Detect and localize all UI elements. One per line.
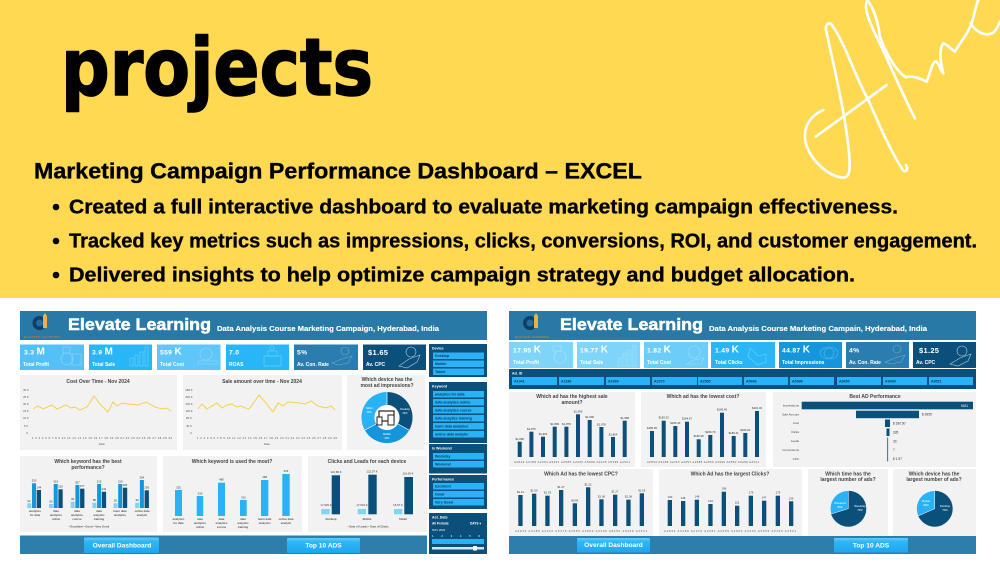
line chart: cost over time: 15 K bbox=[23, 409, 29, 413]
KPI cards: Total Impressions bbox=[782, 360, 825, 366]
bar chart: keyword most used: 480 bbox=[219, 478, 224, 482]
bar chart: clicks and leads by device: • Sum of Leads • Sum of Clicks bbox=[347, 524, 389, 528]
funnel chart: best ad performance: Impressions bbox=[783, 404, 800, 408]
bar chart: keyword performance: analytic bbox=[137, 513, 148, 517]
main heading: Marketing Campaign Performance Dashboard – EXCEL bbox=[34, 158, 642, 184]
bar chart: keyword most used: training bbox=[238, 525, 248, 529]
title: projects bbox=[61, 22, 373, 114]
KPI cards: ROAS bbox=[229, 362, 244, 368]
slicer: performance: Excellent bbox=[435, 484, 452, 488]
bar chart: highest sale amount: $1,875 bbox=[527, 427, 536, 431]
line chart: sale amount over time: 280 K bbox=[185, 388, 193, 392]
KPI cards: Av. CPC bbox=[366, 362, 386, 368]
line chart: sale amount over time: Date bbox=[264, 442, 270, 446]
slicer: act date timeline: 1 2 3 4 5 6 bbox=[432, 534, 480, 538]
bar chart: lowest CPC: $1.41 bbox=[517, 490, 524, 494]
funnel chart: best ad performance: $ 180.50 bbox=[893, 422, 906, 426]
slicer: is weekend: Weekday bbox=[435, 454, 451, 458]
bar chart: lowest CPC: $1.53 bbox=[638, 488, 646, 492]
bar chart: highest sale amount: $1,995 bbox=[574, 410, 583, 414]
slicer: is weekend bbox=[429, 444, 487, 474]
bar chart: lowest CPC: $1.47 bbox=[558, 485, 565, 489]
footer navigation: Top 10 ADS bbox=[305, 542, 342, 550]
line chart: cost over time: 10 K bbox=[23, 416, 29, 420]
funnel chart: best ad performance bbox=[773, 392, 976, 467]
bar chart: keyword performance: 82 bbox=[114, 498, 117, 502]
bar chart: keyword performance: 319 bbox=[53, 480, 58, 484]
bar chart: clicks and leads by device: 17,001 K bbox=[356, 503, 368, 507]
pie chart: time with most ads: largest number of ads? bbox=[820, 477, 876, 483]
bar chart: keyword most used: data bbox=[240, 517, 246, 521]
bar chart: lowest cost: A2843 A3188 A2310 A2051 A2585 A2660 A3399 A2850 A9499 A2521 bbox=[647, 460, 759, 464]
bullet list bbox=[53, 196, 977, 286]
bar chart: keyword performance: 262 bbox=[58, 484, 63, 488]
bar chart: lowest cost: $180.62 bbox=[740, 428, 751, 432]
KPI cards: Total Profit bbox=[23, 362, 49, 368]
funnel chart: best ad performance: 335 bbox=[893, 430, 899, 434]
bar chart: lowest CPC: A2843 A3188 A2310 A5376 A2585 A2660 A3399 A8450 A9499 A2521 bbox=[515, 529, 647, 533]
bar chart: lowest cost: $183.23 bbox=[659, 416, 669, 420]
slicer: keyword: data analytics online bbox=[435, 400, 470, 404]
bar chart: lowest cost: $190.45 bbox=[717, 408, 727, 412]
dashboard header bbox=[20, 311, 487, 340]
bar chart: keyword performance: online bbox=[52, 517, 61, 521]
bar chart: clicks and leads by device: Clicks and Leads for each device bbox=[328, 459, 407, 465]
KPI cards: 3.3 M bbox=[24, 346, 45, 358]
footer navigation: Top 10 ADS bbox=[853, 542, 890, 550]
KPI cards: 5% bbox=[297, 350, 307, 356]
bar chart: keyword most used: analytics bbox=[259, 521, 271, 525]
bar chart: keyword performance: analytics bbox=[71, 513, 83, 517]
pie chart: time with most ads: 30% bbox=[837, 505, 843, 509]
slicer: keyword: analytics for data bbox=[435, 392, 466, 396]
KPI cards: 4% bbox=[849, 348, 859, 354]
KPI cards: Total Clicks bbox=[715, 360, 743, 366]
bar chart: lowest CPC: $1.06 bbox=[625, 495, 632, 499]
donut chart: device impressions bbox=[347, 375, 425, 450]
bar chart: keyword performance: online data bbox=[135, 509, 150, 513]
pie chart: time with most ads: 70% bbox=[857, 508, 863, 512]
dashboard header: Data Analysis Course Marketing Campain, Hyderabad, India bbox=[709, 324, 928, 333]
bar chart: keyword most used: learn data bbox=[258, 517, 272, 521]
donut chart: device impressions: 34% bbox=[402, 411, 408, 415]
KPI cards: 19.77 K bbox=[580, 344, 609, 356]
bar chart: highest sale amount: A2843 A3188 A2304 A5921 A2585 A2660 A5999 A2435 A9499 A2521 bbox=[514, 460, 630, 464]
dashboard header: ELEVATE LEARNING bbox=[24, 335, 61, 339]
dashboard header bbox=[509, 311, 976, 340]
bar chart: lowest cost: $180.70 bbox=[705, 430, 716, 434]
pie chart: time with most ads: Weekday bbox=[854, 504, 866, 508]
bar chart: lowest CPC: $1.27 bbox=[612, 490, 619, 494]
donut chart: device impressions: 33% bbox=[384, 436, 390, 440]
bar chart: keyword performance: performance? bbox=[71, 465, 105, 471]
bar chart: keyword most used: 310 bbox=[241, 496, 246, 500]
pie chart: device with most ads: largest number of ads? bbox=[906, 477, 962, 483]
bar chart: lowest cost: $180.95 bbox=[647, 426, 657, 430]
bar chart: keyword most used: Which keyword is used the most? bbox=[192, 459, 272, 465]
bar chart: keyword performance: 90 bbox=[136, 498, 139, 502]
Ad ID slicer: A2585 bbox=[700, 380, 711, 384]
bar chart: lowest cost: $180.08 bbox=[694, 434, 704, 438]
bar chart: largest clicks: 148 bbox=[695, 495, 700, 499]
slicer: performance bbox=[429, 475, 487, 509]
bar chart: highest sale amount: $1,880 bbox=[515, 437, 524, 441]
bar chart: keyword performance: 244 bbox=[37, 486, 42, 490]
bar chart: clicks and leads by device: 116,09 K bbox=[402, 472, 414, 476]
panel: overall dashboard bbox=[20, 311, 487, 554]
footer navigation bbox=[509, 536, 976, 554]
funnel chart: best ad performance: CPC bbox=[793, 457, 800, 461]
Ad ID slicer: A9499 bbox=[885, 380, 896, 384]
funnel chart: best ad performance: Cost bbox=[793, 421, 799, 425]
KPI cards: 3.9 M bbox=[92, 346, 113, 358]
Ad ID slicer: A2070 bbox=[654, 380, 665, 384]
bar chart: largest clicks: 147 bbox=[762, 496, 767, 500]
bar chart: keyword most used: anaytics bbox=[237, 521, 249, 525]
line chart: sale amount over time: Sale amount over time - Nov 2024 bbox=[222, 379, 302, 385]
bar chart: keyword most used: 503 bbox=[284, 469, 289, 473]
slicer: act date timeline: All Periods bbox=[432, 522, 449, 526]
bar chart: lowest cost: Which ad has the lowest cost? bbox=[667, 394, 739, 400]
donut chart: device impressions: Mobile bbox=[383, 432, 391, 436]
bar chart: keyword performance: 277 bbox=[80, 484, 85, 488]
KPI cards: Total Cost bbox=[160, 362, 184, 368]
bar chart: keyword performance: 320 bbox=[32, 478, 37, 482]
bar chart: keyword performance: data bbox=[53, 509, 59, 513]
bar chart: largest clicks: 175 bbox=[749, 491, 754, 495]
line chart: cost over time: Date bbox=[99, 442, 105, 446]
Ad ID slicer: A1186 bbox=[561, 380, 571, 384]
signature bbox=[805, 0, 1000, 178]
footer navigation: Overall Dashboard bbox=[584, 542, 643, 549]
line chart: sale amount over time: 40 K bbox=[186, 424, 192, 428]
line chart: cost over time: 0 bbox=[26, 431, 28, 435]
bar chart: keyword performance: course bbox=[72, 517, 82, 521]
KPI cards: Total Profit bbox=[513, 360, 539, 366]
bar chart: lowest cost: $191.36 bbox=[752, 406, 762, 410]
bar chart: keyword performance: 83 bbox=[49, 500, 53, 504]
slicer: device: Device bbox=[432, 346, 444, 350]
bar chart: clicks and leads by device: 121,86 K bbox=[330, 470, 342, 474]
KPI cards: Av. Con. Rate bbox=[849, 360, 881, 366]
bar chart: keyword most used: course bbox=[217, 525, 227, 529]
Ad ID slicer: A2069 bbox=[608, 380, 619, 384]
pie chart: device with most ads: Desktop bbox=[940, 504, 951, 508]
bar chart: highest sale amount: $1,978 bbox=[597, 422, 606, 426]
donut chart: device impressions: Desktop bbox=[400, 407, 410, 411]
bar chart: lowest CPC: $1.50 bbox=[530, 489, 538, 493]
KPI cards bbox=[509, 342, 976, 368]
bar chart: highest sale amount: $1,899 bbox=[550, 422, 559, 426]
bar chart: highest sale amount: $1,990 bbox=[585, 415, 594, 419]
slicer: act date timeline: NOV 2024 bbox=[432, 528, 446, 532]
bar chart: keyword performance: 354 bbox=[140, 476, 145, 480]
bar chart: lowest CPC: $1.33 bbox=[544, 491, 551, 495]
funnel chart: best ad performance: Conversions bbox=[782, 448, 799, 452]
slicer: act date timeline: DAYS ▾ bbox=[470, 522, 481, 526]
bar chart: highest sale amount: $1,878 bbox=[562, 422, 571, 426]
bar chart: keyword most used: data bbox=[219, 517, 225, 521]
bar chart: highest sale amount bbox=[509, 392, 635, 467]
bar chart: keyword performance: 319 bbox=[118, 480, 123, 484]
bar chart: keyword performance: 96 bbox=[71, 497, 75, 501]
dashboard header: Data Analysis Course Marketing Campaign, Hyderabad, India bbox=[217, 324, 440, 333]
bar chart: keyword performance: 243 bbox=[102, 487, 107, 491]
bar chart: clicks and leads by device: 16,67 K bbox=[393, 503, 403, 507]
bar chart: lowest cost bbox=[641, 392, 766, 467]
bar chart: keyword performance: analytics bbox=[50, 513, 62, 517]
bar chart: clicks and leads by device: 122,07 K bbox=[366, 470, 378, 474]
slicer: keyword: Keyword bbox=[432, 384, 447, 388]
bar chart: highest sale amount: $1,904 bbox=[539, 432, 548, 436]
Ad ID slicer: A9521 bbox=[931, 380, 942, 384]
Ad ID slicer: Ad_ID bbox=[512, 372, 523, 376]
bar chart: highest sale amount: Which ad has the highest sale bbox=[536, 394, 608, 400]
dashboard header: ELEVATE LEARNING bbox=[515, 335, 550, 339]
Ad ID slicer bbox=[509, 369, 976, 389]
slicer: act date timeline: Act_Date bbox=[432, 516, 448, 520]
bullet list: Created a full interactive dashboard to evaluate marketing campaign effectiveness. bbox=[69, 196, 898, 218]
line chart: sale amount over time: 0 bbox=[190, 431, 192, 435]
bar chart: keyword performance: analytics bbox=[114, 513, 126, 517]
bar chart: largest clicks: A2843 A3188 A2310 A2051 A2585 A2660 A3300 A5955 A8499 A2521 bbox=[664, 529, 796, 533]
KPI cards: Total Sale bbox=[580, 360, 603, 366]
KPI cards: Total Sale bbox=[92, 362, 115, 368]
donut chart: device impressions: Which device has the bbox=[362, 377, 413, 383]
funnel chart: best ad performance: Leads bbox=[791, 439, 799, 443]
slicer: performance: Good bbox=[435, 492, 444, 496]
bar chart: keyword performance: analytics bbox=[29, 509, 41, 513]
line chart: sale amount over time: 120 K bbox=[185, 409, 193, 413]
slicer: keyword bbox=[429, 382, 487, 443]
bar chart: highest sale amount: $1,988 bbox=[620, 416, 629, 420]
funnel chart: best ad performance: $ 3995 bbox=[922, 412, 932, 416]
bar chart: keyword performance: learn data bbox=[113, 509, 127, 513]
Ad ID slicer: A1041 bbox=[514, 380, 525, 384]
bar chart: lowest CPC: $0.83 bbox=[571, 498, 579, 502]
bar chart: keyword performance: • Excellent • Good • Very Good bbox=[69, 524, 109, 528]
bar chart: highest sale amount: amount? bbox=[561, 400, 583, 406]
bar chart: keyword performance: 92 bbox=[27, 499, 31, 503]
slicer: is weekend: Is Weekend bbox=[432, 446, 452, 450]
bar chart: largest clicks: 160 bbox=[668, 495, 673, 499]
line chart: cost over time: 20 K bbox=[23, 402, 29, 406]
bar chart: keyword performance: 283 bbox=[123, 483, 128, 487]
dashboard header: Elevate Learning bbox=[560, 315, 703, 334]
bar chart: clicks and leads by device: Tablet bbox=[399, 517, 407, 521]
bar chart: clicks and leads by device bbox=[308, 456, 427, 532]
line chart: cost over time: 25 K bbox=[23, 395, 29, 399]
funnel chart: best ad performance: Sale Amount bbox=[782, 412, 799, 416]
pie chart: time with most ads: Which time has the bbox=[825, 472, 871, 478]
yellow banner background bbox=[0, 0, 1000, 298]
bar chart: clicks and leads by device: Desktop bbox=[325, 517, 337, 521]
KPI cards: 44.87 K bbox=[782, 344, 811, 356]
line chart: cost over time: 5 K bbox=[24, 424, 28, 428]
slicer: device bbox=[429, 344, 487, 377]
line chart: sale amount over time: 200 K bbox=[185, 402, 193, 406]
bar chart: keyword performance: data bbox=[74, 509, 80, 513]
Ad ID slicer: A5666 bbox=[746, 380, 757, 384]
bar chart: keyword most used: 325 bbox=[176, 486, 181, 490]
line chart: sale amount over time: 80 K bbox=[186, 416, 192, 420]
bar chart: keyword performance: anaytics bbox=[93, 513, 105, 517]
bar chart: keyword performance: 307 bbox=[75, 480, 80, 484]
funnel chart: best ad performance: 5431 bbox=[961, 404, 968, 408]
donut chart: device impressions: 33% bbox=[366, 410, 372, 414]
slicer: device: Mobile bbox=[435, 362, 446, 366]
funnel chart: best ad performance: Clicks bbox=[791, 430, 799, 434]
line chart: sale amount over time: 1 2 3 4 5 6 7 8 9 10 11 12 13 14 15 16 17 18 19 20 21 22 23 24 25 26 27 28 29 30 bbox=[197, 436, 337, 440]
bullet list: Delivered insights to help optimize campaign strategy and budget allocation. bbox=[69, 264, 855, 286]
bar chart: keyword performance: 259 bbox=[144, 486, 149, 490]
funnel chart: best ad performance: Best AD Performance bbox=[849, 394, 901, 400]
bar chart: keyword performance: data bbox=[96, 509, 102, 513]
pie chart: device with most ads: 70% bbox=[942, 508, 948, 512]
bar chart: keyword most used: 488 bbox=[262, 475, 267, 479]
bar chart: keyword performance: 315 bbox=[97, 480, 102, 484]
bar chart: keyword performance: 88 bbox=[93, 498, 96, 502]
bar chart: keyword most used: 320 bbox=[198, 492, 203, 496]
KPI cards: 17.95 K bbox=[513, 344, 542, 356]
bar chart: lowest cost: $180.41 bbox=[729, 431, 739, 435]
bar chart: highest sale amount: $1,864 bbox=[609, 432, 618, 436]
Ad ID slicer: A5999 bbox=[792, 380, 803, 384]
slicer: keyword: data anaytics training bbox=[435, 416, 472, 420]
bar chart: keyword most used: for data bbox=[173, 521, 184, 525]
line chart: cost over time: Cost Over Time - Nov 2024 bbox=[66, 379, 130, 385]
KPI cards: 559 K bbox=[160, 346, 182, 358]
KPI cards: $1.25 bbox=[919, 346, 939, 355]
bar chart: largest clicks: 175 bbox=[776, 491, 781, 495]
slicer: keyword: online data analytic bbox=[435, 432, 468, 436]
bar chart: largest clicks: 115 bbox=[735, 501, 740, 505]
funnel chart: best ad performance: $ 1.57 bbox=[893, 457, 902, 461]
slicer: is weekend: Weekend bbox=[435, 462, 451, 466]
bar chart: keyword most used: online bbox=[196, 525, 205, 529]
pie chart: device with most ads: Which device has the bbox=[909, 472, 960, 478]
bar chart: keyword most used bbox=[163, 456, 302, 532]
slicer: performance: Performance bbox=[432, 478, 454, 482]
bar chart: keyword most used: analytics bbox=[173, 517, 185, 521]
KPI cards: 7.0 bbox=[229, 350, 239, 356]
bar chart: keyword most used: online data bbox=[279, 517, 294, 521]
slicer: performance: Very Good bbox=[435, 500, 453, 504]
slicer: keyword: learn data analytics bbox=[435, 424, 468, 428]
bar chart: keyword performance bbox=[20, 456, 157, 532]
pie chart: device with most ads: Mobile bbox=[922, 499, 931, 503]
footer navigation: Overall Dashboard bbox=[93, 542, 151, 550]
bar chart: keyword performance: Which keyword has the best bbox=[54, 459, 122, 465]
line chart: cost over time bbox=[20, 375, 177, 450]
bar chart: keyword most used: analytic bbox=[281, 521, 292, 525]
bullet list: Tracked key metrics such as impressions, clicks, conversions, ROI, and customer engagement. bbox=[69, 230, 977, 252]
bar chart: largest clicks bbox=[659, 469, 802, 536]
pie chart: time with most ads bbox=[808, 469, 888, 536]
line chart: sale amount over time bbox=[183, 375, 342, 450]
donut chart: device impressions: Tablet bbox=[366, 406, 373, 410]
pie chart: device with most ads: 30% bbox=[923, 503, 929, 507]
KPI cards: Total Cost bbox=[647, 360, 671, 366]
bar chart: lowest CPC: Which Ad has the lowest CPC? bbox=[544, 472, 618, 478]
slicer: device: Tablet bbox=[435, 370, 446, 374]
funnel chart: best ad performance: 30 bbox=[893, 440, 897, 444]
bar chart: lowest CPC: $1.06 bbox=[598, 494, 605, 498]
bar chart: clicks and leads by device: 17,929 K bbox=[320, 503, 332, 507]
KPI cards: 1.82 K bbox=[647, 344, 672, 356]
KPI cards: $1.65 bbox=[368, 348, 388, 357]
slicer: device: Desktop bbox=[435, 354, 450, 358]
bar chart: keyword most used: analytics bbox=[194, 521, 206, 525]
slicer: keyword: data analytics course bbox=[435, 408, 472, 412]
bar chart: largest clicks: 148 bbox=[681, 496, 686, 500]
bar chart: keyword most used: data bbox=[197, 517, 203, 521]
footer navigation bbox=[20, 536, 427, 554]
dashboard header: Elevate Learning bbox=[68, 315, 211, 334]
KPI cards: Av. CPC bbox=[916, 360, 936, 366]
KPI cards: 1.49 K bbox=[715, 344, 740, 356]
KPI cards bbox=[20, 344, 426, 370]
line chart: cost over time: 30 K bbox=[23, 388, 29, 392]
bar chart: lowest cost: $184.67 bbox=[682, 416, 692, 420]
bar chart: clicks and leads by device: Mobile bbox=[363, 517, 372, 521]
bar chart: keyword performance: for data bbox=[30, 513, 41, 517]
bar chart: largest clicks: 139 bbox=[789, 496, 794, 500]
donut chart: device impressions: most ad impressions? bbox=[360, 383, 414, 389]
slicer: act date timeline bbox=[429, 513, 487, 554]
bar chart: lowest cost: $186.40 bbox=[670, 421, 681, 425]
bar chart: lowest CPC bbox=[509, 469, 653, 536]
bar chart: lowest CPC: $1.52 bbox=[584, 482, 592, 486]
bar chart: largest clicks: 196 bbox=[722, 487, 727, 491]
pie chart: time with most ads: Weekend bbox=[834, 501, 846, 505]
Ad ID slicer: A8450 bbox=[839, 380, 850, 384]
bar chart: largest clicks: Which Ad has the largest Clicks? bbox=[691, 472, 769, 478]
panel: top ads dashboard bbox=[509, 311, 976, 554]
line chart: sale amount over time: 240 K bbox=[185, 395, 193, 399]
bar chart: largest clicks: 124 bbox=[708, 499, 713, 503]
line chart: cost over time: 1 2 3 4 5 6 7 8 9 10 11 12 13 14 15 16 17 18 19 20 21 22 23 24 25 26 27 28 29 30 bbox=[32, 436, 172, 440]
bar chart: keyword most used: analytics bbox=[216, 521, 228, 525]
bar chart: keyword performance: training bbox=[94, 517, 104, 521]
KPI cards: Av. Con. Rate bbox=[297, 362, 329, 368]
pie chart: device with most ads bbox=[893, 469, 976, 536]
funnel chart: best ad performance: 7 bbox=[893, 448, 895, 452]
